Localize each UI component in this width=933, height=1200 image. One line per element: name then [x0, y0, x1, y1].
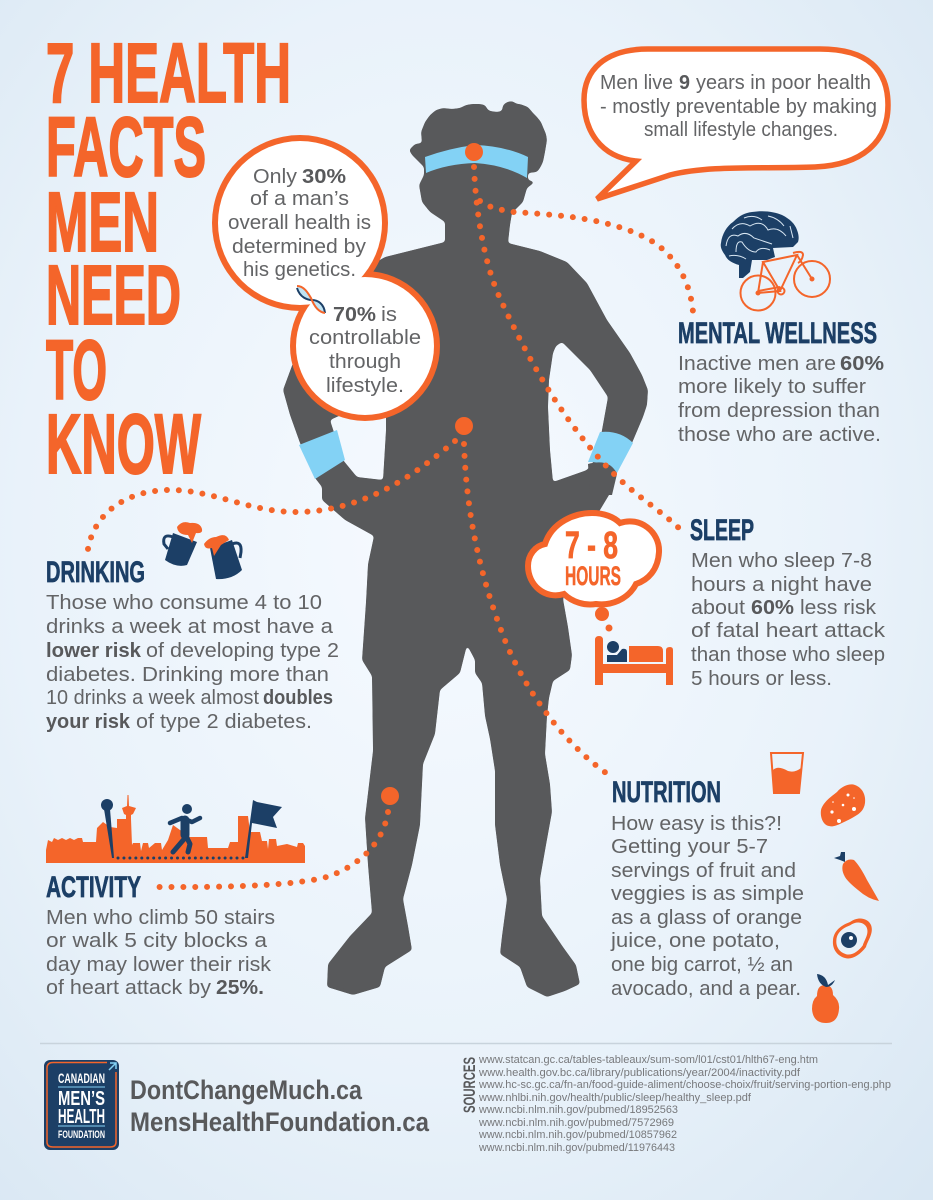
title: FACTS [46, 100, 206, 194]
panel: mental wellness: from depression than [678, 399, 880, 422]
icon: bed [595, 636, 673, 685]
panel: nutrition: one big carrot, ½ an [611, 953, 793, 976]
icon: thought cloud 7-8 hours: 7 - 8 [565, 525, 618, 567]
panel: sleep: hours a night have [691, 573, 872, 596]
website links: MensHealthFoundation.ca [130, 1107, 430, 1137]
logo: Canadian Men's Health Foundation: MEN’S [58, 1087, 105, 1110]
panel: sleep: about [691, 596, 745, 619]
callout: genetics and lifestyle bubbles: his genetics. [243, 258, 356, 281]
panel: sleep: than those who sleep [691, 643, 885, 666]
panel: drinking: lower risk [46, 639, 142, 662]
title [46, 26, 291, 491]
logo: Canadian Men's Health Foundation: CANADIAN [58, 1071, 105, 1086]
sources list: www.statcan.gc.ca/tables-tableaux/sum-som/l01/cst01/hlth67-eng.htm [478, 1054, 818, 1066]
marker: knee [381, 787, 399, 805]
panel: sleep: 60% [751, 596, 794, 619]
panel: mental wellness: 60% [840, 352, 884, 375]
callout: genetics and lifestyle bubbles: through [329, 350, 401, 373]
panel: drinking: of developing type 2 [146, 639, 339, 662]
logo: Canadian Men's Health Foundation: FOUNDATION [58, 1129, 105, 1141]
website links [130, 1075, 430, 1137]
right hand [588, 462, 617, 495]
panel: mental wellness: those who are active. [678, 423, 881, 446]
title: 7 HEALTH [46, 26, 291, 120]
callout: genetics and lifestyle bubbles: is [381, 303, 397, 326]
title: MEN [46, 175, 159, 269]
sources list: www.ncbi.nlm.nih.gov/pubmed/18952563 [478, 1104, 678, 1116]
title: NEED [46, 248, 181, 342]
sources list: www.nhlbi.nih.gov/health/public/sleep/healthy_sleep.pdf [478, 1092, 752, 1104]
panel: nutrition: avocado, and a pear. [611, 977, 801, 1000]
dotted connector: head to mental wellness [480, 201, 693, 312]
marker: head [465, 143, 483, 161]
panel: sleep: less risk [800, 596, 877, 619]
panel: sleep [690, 514, 886, 690]
panel: mental wellness [678, 317, 884, 446]
panel: drinking: diabetes. Drinking more than [46, 663, 329, 686]
panel: sleep: 5 hours or less. [691, 667, 832, 690]
callout: genetics and lifestyle bubbles: determined by [232, 235, 367, 258]
logo: Canadian Men's Health Foundation [44, 1060, 119, 1150]
panel: nutrition [610, 776, 804, 1000]
panel: nutrition: juice, one potato, [610, 929, 780, 952]
dotted connector: head to sleep [474, 167, 680, 529]
icon: beer mugs [164, 522, 242, 579]
marker: belly [455, 417, 473, 435]
icon: brain [721, 211, 799, 278]
panel: activity: Men who climb 50 stairs [46, 906, 275, 929]
callout: genetics and lifestyle bubbles: controllable [309, 326, 421, 349]
sources list: www.health.gov.bc.ca/library/publications/year/2004/inactivity.pdf [478, 1067, 801, 1079]
icon: thought cloud 7-8 hours [528, 513, 659, 632]
panel: nutrition: as a glass of orange [611, 906, 802, 929]
website links: DontChangeMuch.ca [130, 1075, 363, 1105]
panel: drinking: your risk [46, 710, 131, 733]
icon: potato [821, 784, 865, 826]
callout: speech bubble: 9 [679, 71, 690, 94]
dotted connector: knee to activity [150, 812, 388, 887]
icon: avocado [833, 918, 872, 958]
sources list [460, 1054, 891, 1154]
icon: thought cloud 7-8 hours: HOURS [565, 561, 621, 591]
panel: drinking: DRINKING [46, 556, 145, 589]
panel: nutrition: NUTRITION [612, 776, 721, 809]
panel: nutrition: veggies is as simple [611, 882, 804, 905]
panel: nutrition: How easy is this?! [611, 812, 782, 835]
callout: speech bubble [584, 49, 888, 199]
panel: mental wellness: more likely to suffer [678, 375, 866, 398]
callout: speech bubble: years in poor health [696, 71, 871, 94]
callout: genetics and lifestyle bubbles [212, 135, 440, 421]
callout: genetics and lifestyle bubbles: 30% [302, 165, 346, 188]
left wristband [299, 430, 345, 479]
dotted connector: belly to nutrition [464, 444, 606, 773]
panel: drinking: Those who consume 4 to 10 [46, 591, 322, 614]
panel: activity: of heart attack by [46, 976, 212, 999]
panel: drinking: doubles [263, 686, 333, 709]
panel: drinking: 10 drinks a week almost [46, 686, 259, 709]
male silhouette figure [283, 101, 648, 997]
panel: sleep: Men who sleep 7-8 [691, 549, 872, 572]
callout: speech bubble: Men live [600, 71, 673, 94]
panel: drinking: of type 2 diabetes. [136, 710, 312, 733]
icon: bicycle [740, 252, 830, 310]
panel: nutrition: Getting your 5-7 [611, 835, 768, 858]
panel: sleep: SLEEP [690, 514, 754, 547]
sources list: www.ncbi.nlm.nih.gov/pubmed/10857962 [478, 1129, 677, 1141]
sources list: www.ncbi.nlm.nih.gov/pubmed/7572969 [478, 1117, 674, 1129]
panel: activity: day may lower their risk [46, 953, 272, 976]
right wristband [588, 432, 633, 473]
callout: genetics and lifestyle bubbles: Only [253, 165, 298, 188]
panel: activity: or walk 5 city blocks a [46, 929, 268, 952]
panel: drinking [46, 556, 339, 733]
callout: genetics and lifestyle bubbles: lifestyle. [326, 374, 404, 397]
panel: sleep: of fatal heart attack [691, 619, 886, 642]
icon: DNA strand [297, 286, 325, 313]
panel: mental wellness: Inactive men are [678, 352, 836, 375]
callout: genetics and lifestyle bubbles: of a man’s [250, 187, 349, 210]
dotted connector: belly to drinking [88, 441, 455, 549]
callout: speech bubble: - mostly preventable by making [600, 95, 877, 118]
sources list: www.hc-sc.gc.ca/fn-an/food-guide-aliment/choose-choix/fruit/serving-portion-eng.php [478, 1079, 891, 1091]
panel: nutrition: servings of fruit and [611, 859, 796, 882]
panel: activity [46, 871, 275, 999]
callout: genetics and lifestyle bubbles: 70% [333, 303, 376, 326]
icon: runner [170, 804, 200, 852]
title: TO [46, 323, 107, 417]
panel: drinking: drinks a week at most have a [46, 615, 334, 638]
panel: activity: 25%. [216, 976, 264, 999]
callout: genetics and lifestyle bubbles: overall health is [228, 211, 371, 234]
title: KNOW [46, 397, 201, 491]
logo: Canadian Men's Health Foundation: HEALTH [58, 1105, 105, 1128]
callout: speech bubble: small lifestyle changes. [644, 118, 838, 141]
panel: activity: ACTIVITY [46, 871, 141, 904]
sources list: www.ncbi.nlm.nih.gov/pubmed/11976443 [478, 1142, 675, 1154]
icon: pear [812, 974, 839, 1023]
icon: carrot [834, 852, 879, 901]
sources list: SOURCES [460, 1057, 479, 1113]
icon: juice glass [771, 753, 803, 793]
headband [425, 145, 528, 178]
icon: city skyline with runner [46, 795, 305, 863]
